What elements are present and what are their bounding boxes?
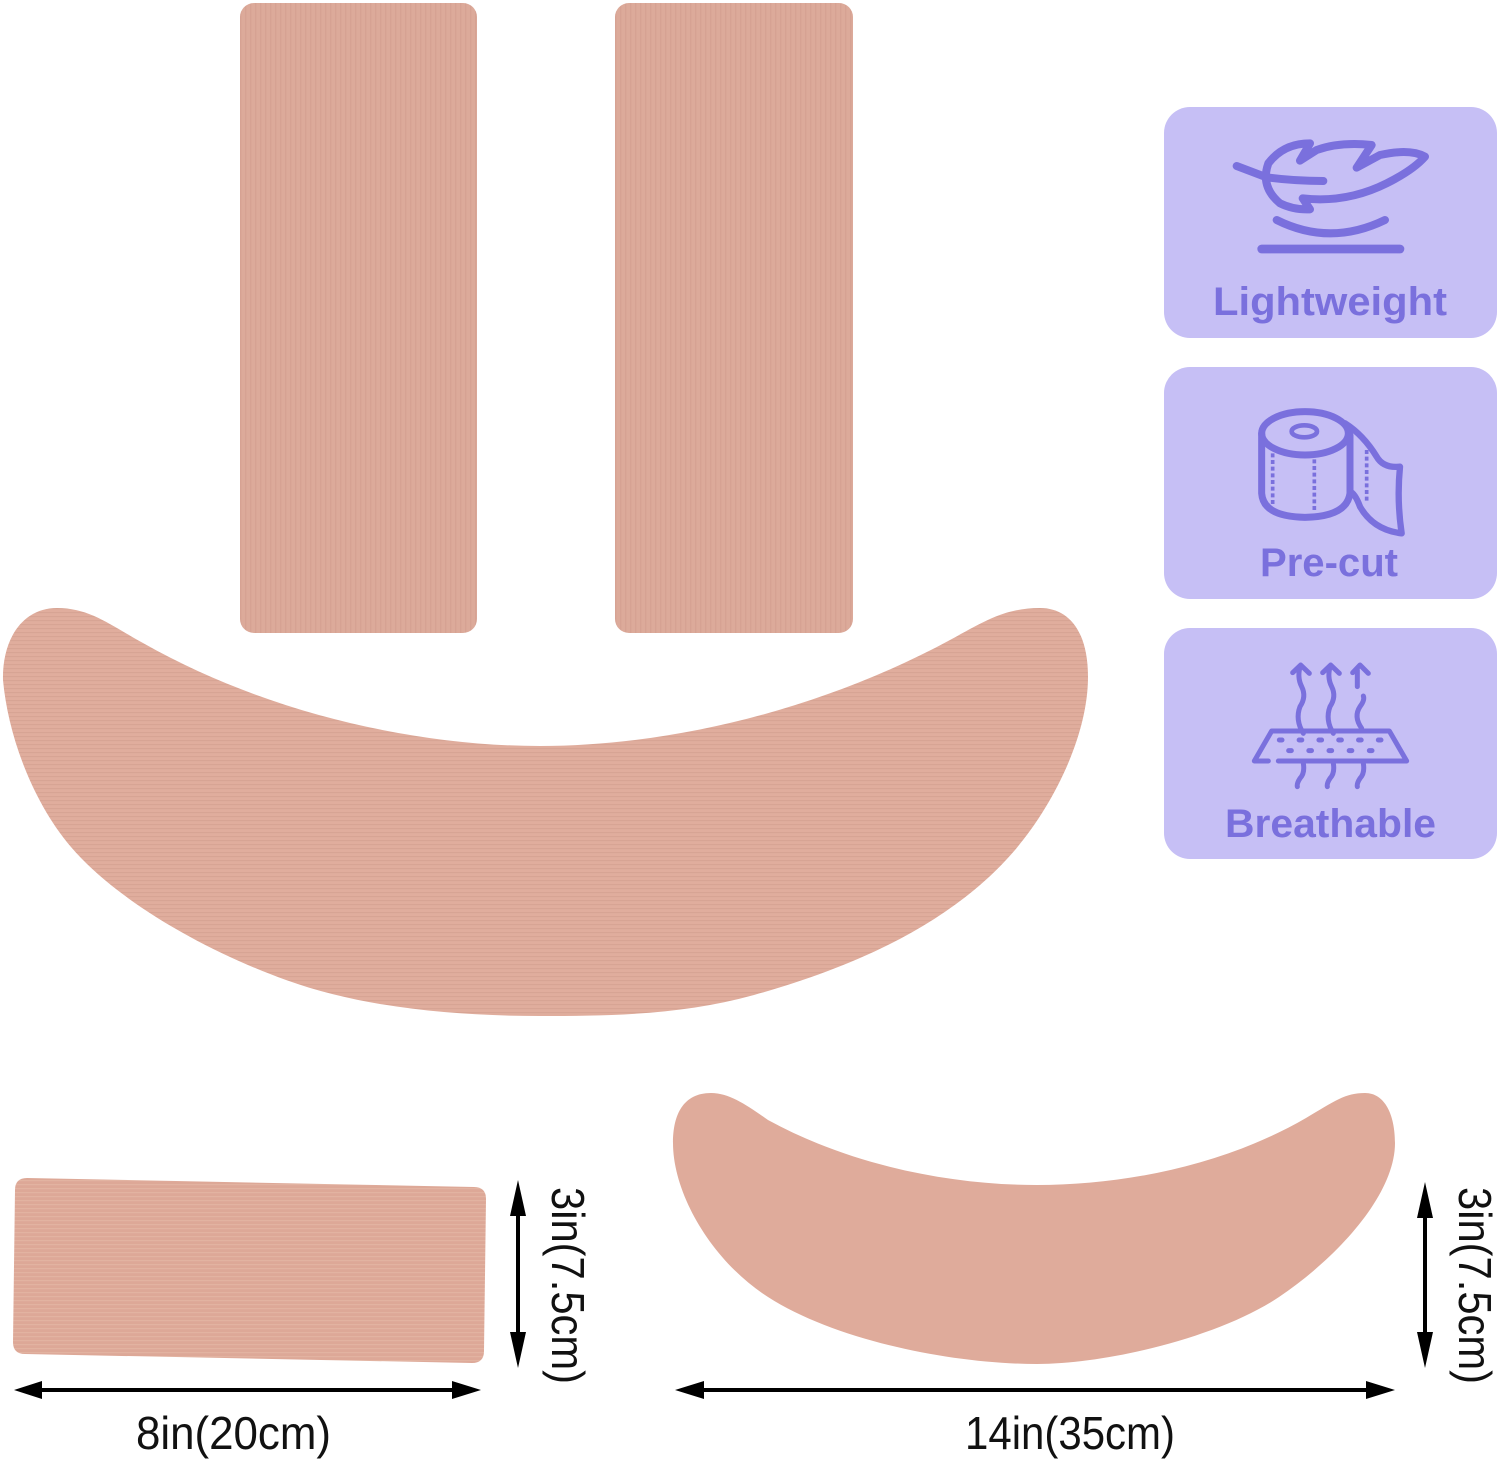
tape strip: upper right — [615, 3, 853, 633]
tape strip: small with 8in size — [13, 1178, 486, 1363]
dimension label: strip height: 3in(7.5cm) — [542, 1187, 594, 1384]
panel: Pre-cut — [1164, 367, 1497, 599]
arrow: crescent width — [675, 1381, 1395, 1399]
dimension label: strip width: 8in(20cm) — [136, 1407, 331, 1459]
tape strip: upper left — [240, 3, 477, 633]
dimension label: crescent height: 3in(7.5cm) — [1449, 1187, 1500, 1384]
arrow: strip width — [14, 1381, 481, 1399]
arrow: crescent height — [1417, 1182, 1433, 1368]
label: Pre-cut: Pre-cut — [1260, 541, 1398, 585]
crescent tape: large — [3, 608, 1088, 1016]
label: Breathable: Breathable — [1225, 802, 1436, 846]
panel: Breathable — [1164, 628, 1497, 859]
icon: feather — [1237, 143, 1425, 249]
crescent tape: small with 14in size — [673, 1093, 1395, 1364]
icon: tape roll — [1262, 412, 1402, 533]
label: Lightweight: Lightweight — [1213, 280, 1447, 324]
dimension label: crescent width: 14in(35cm) — [965, 1407, 1175, 1459]
icon: breathable fabric — [1254, 665, 1407, 787]
panel: Lightweight — [1164, 107, 1497, 338]
arrow: strip height — [510, 1180, 526, 1368]
